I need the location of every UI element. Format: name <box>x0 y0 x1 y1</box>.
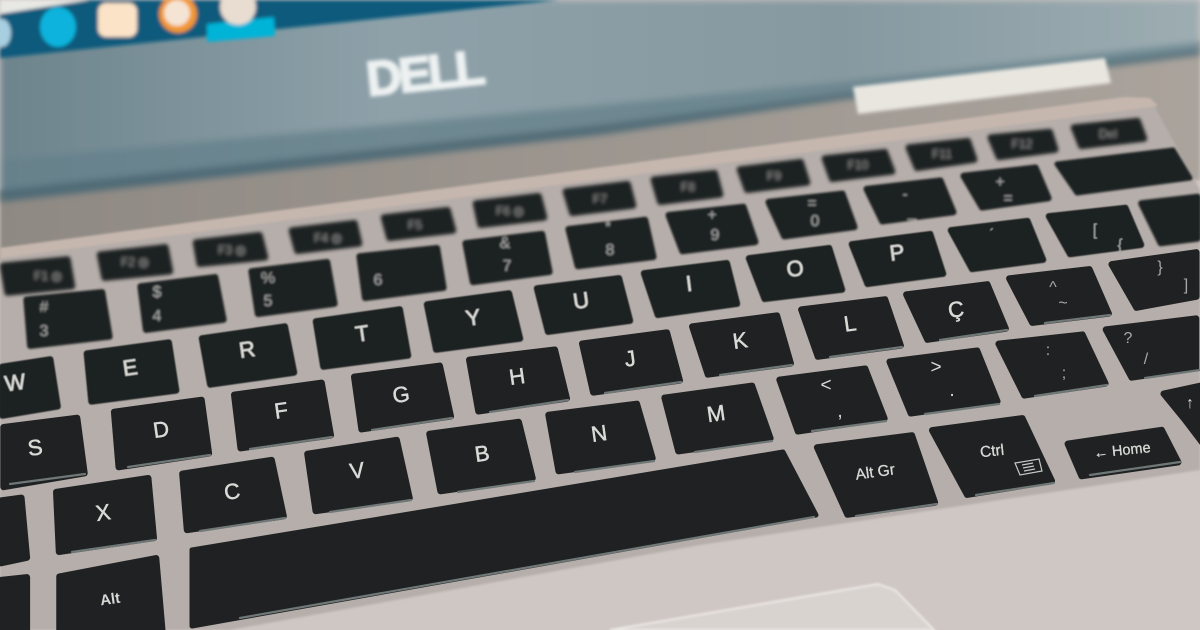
key: Alt Gr: Alt Gr <box>854 461 896 484</box>
key row: function keys: Del <box>1099 127 1117 141</box>
key row: home row: K <box>731 327 749 354</box>
key row: numbers: + <box>707 207 717 224</box>
key row: bottom letters: C <box>222 478 242 505</box>
key row: QWERTY: R <box>237 336 257 363</box>
key row: QWERTY <box>2 208 1141 416</box>
key row: numbers: 7 <box>503 258 512 275</box>
key row: QWERTY: P <box>888 239 906 266</box>
laptop lid bezel <box>0 0 1200 202</box>
key row: numbers: $ <box>153 284 162 301</box>
key row: home row: F <box>273 397 289 424</box>
key row: modifier keys and spacebar <box>1 385 1200 630</box>
key row: numbers: 6 <box>374 272 383 289</box>
key row: QWERTY: I <box>684 271 694 296</box>
key row: function keys: F7 <box>593 192 607 206</box>
key row: numbers: & <box>500 235 511 252</box>
key row: function keys: F11 <box>932 147 952 161</box>
key row: numbers: 0 <box>811 213 820 230</box>
key row: numbers: # <box>40 299 49 316</box>
key row: QWERTY: O <box>785 255 805 282</box>
key: Ctrl <box>932 418 1054 495</box>
key row: QWERTY: T <box>354 320 370 347</box>
key row: function keys: F12 <box>1012 137 1033 151</box>
key row: QWERTY: W <box>3 369 27 396</box>
key row: bottom letters: V <box>348 457 366 484</box>
key row: numbers: 4 <box>153 308 162 325</box>
key: spacebar <box>192 452 816 626</box>
key row: home row: H <box>507 363 527 390</box>
key row: function keys <box>3 121 1144 293</box>
key row: home row: L <box>842 310 858 337</box>
key row: numbers: 8 <box>606 242 615 259</box>
key row: numbers: 9 <box>711 227 720 244</box>
key row: QWERTY: U <box>571 287 591 314</box>
key row: bottom letters: > <box>930 357 942 378</box>
touchpad <box>610 584 934 630</box>
key row: QWERTY: E <box>121 354 139 381</box>
key row: function keys: F1 ◍ <box>34 269 62 283</box>
key row: function keys: F5 <box>408 218 422 232</box>
key row: home row: Ç <box>947 296 965 323</box>
key row: function keys: F8 <box>681 180 695 194</box>
key row: numbers <box>27 150 1198 346</box>
key: Ctrl: Ctrl <box>979 442 1005 461</box>
key row: bottom letters: ? <box>1124 330 1133 347</box>
key row: bottom letters: B <box>473 440 491 467</box>
key row: function keys: F10 <box>848 158 869 172</box>
key row: function keys: F3 ◍ <box>218 243 246 257</box>
key row: numbers: = <box>807 195 817 212</box>
key row: home row: J <box>623 345 637 372</box>
key row: home row: G <box>391 381 411 408</box>
key row: bottom letters: : <box>1046 342 1050 359</box>
key row: bottom letters: ; <box>1062 365 1066 382</box>
key row: numbers: _ <box>907 204 918 221</box>
key row: home row: ~ <box>1058 295 1068 312</box>
key row: numbers: 3 <box>40 323 49 340</box>
key: Alt <box>59 558 163 630</box>
key: Home <box>1068 430 1180 476</box>
key row: numbers: + <box>995 174 1005 191</box>
key: Home: ← Home <box>1093 440 1151 462</box>
key row: numbers: = <box>1003 190 1013 207</box>
key row: home row: S <box>26 434 44 461</box>
key row: bottom letters: / <box>1144 351 1149 368</box>
key row: numbers: - <box>902 186 908 203</box>
key row: home row: D <box>151 416 171 443</box>
white latch tab <box>853 58 1111 114</box>
hinge area <box>0 40 1200 260</box>
key row: numbers: % <box>261 270 275 287</box>
key row: bottom letters: , <box>837 401 843 422</box>
key row: home row: } <box>1157 259 1163 276</box>
key row: numbers: * <box>605 219 611 236</box>
key row: QWERTY: { <box>1117 237 1123 254</box>
screen strip with app icons <box>0 0 560 58</box>
key row: bottom letters: < <box>820 375 832 396</box>
key row: home row <box>4 252 1196 487</box>
key row: function keys: F9 <box>767 169 781 183</box>
key row: bottom letters: X <box>94 499 112 526</box>
key row: bottom letters: . <box>949 380 955 401</box>
key: Alt: Alt <box>99 590 121 609</box>
key row: bottom letters: M <box>705 400 727 427</box>
key row: bottom letters: N <box>589 420 609 447</box>
key row: QWERTY: [ <box>1093 222 1098 239</box>
key row: QWERTY: Y <box>464 304 482 331</box>
key row: function keys: F2 ◍ <box>121 255 149 269</box>
key row: home row: ^ <box>1049 279 1057 296</box>
key: arrow up: ↑ <box>1186 395 1194 412</box>
key row: home row: ] <box>1184 277 1188 294</box>
key row: numbers: 5 <box>264 293 273 310</box>
key: arrow up <box>1164 385 1200 443</box>
key row: QWERTY: ´ <box>989 227 995 244</box>
key row: function keys: F4 ◍ <box>314 231 342 245</box>
key row: bottom letters <box>1 319 1200 563</box>
key row: function keys: F6 ◍ <box>496 204 524 218</box>
logo: DELL: DELL <box>364 41 487 107</box>
key: Alt Gr <box>817 435 937 516</box>
